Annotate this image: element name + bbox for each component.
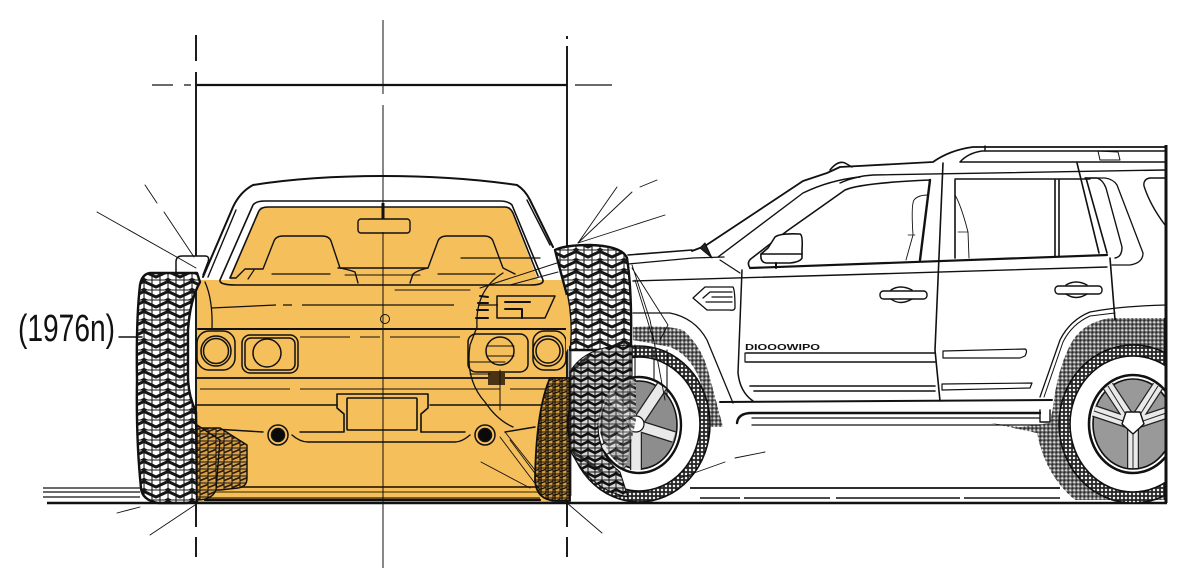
SUV rear edge [1164,145,1168,503]
SUV body [568,146,1200,503]
B pillar [935,163,943,401]
door front edge [738,270,753,401]
door handle front [880,287,927,302]
rear left tyres [137,273,247,503]
front wheel [568,345,710,502]
rear door edge [1077,163,1107,253]
rear view mirror [358,219,410,233]
hood and windshield [628,250,692,255]
rear wheel arch [990,318,1170,500]
construction lines [152,20,612,568]
yellow highlighted rear of car [196,207,567,502]
ghost tail light overlay [461,258,560,427]
right front overlap tyre [535,245,631,501]
side mirror left [176,256,209,275]
badge text: DIOOOWIPO [745,342,821,352]
license plate [337,394,428,432]
side mirror [761,234,802,268]
bumper and exhausts [198,427,535,432]
overlap tread on front wheel [570,345,632,497]
tail lamps right [468,331,566,372]
front wheel arch [633,326,723,427]
trunk lines [211,305,498,308]
seats [230,236,358,283]
fender vent [693,287,735,310]
burst lines [97,180,765,535]
year label: (1976n) [18,308,115,350]
door handle rear [1055,282,1102,298]
rear window [220,201,543,285]
door trims [746,353,935,362]
rear wheel [1058,344,1164,502]
belt lines [750,255,1107,268]
rear door window [954,180,956,258]
front door window [748,180,930,268]
tail lamps left [197,331,298,373]
seat silhouettes [906,195,969,260]
wheel arch lips [633,313,733,403]
ground lines [43,487,1167,503]
rocker [720,400,1052,402]
rear car body outline [176,176,567,500]
roof rail [960,146,1167,162]
rear quarter window [1085,178,1122,258]
